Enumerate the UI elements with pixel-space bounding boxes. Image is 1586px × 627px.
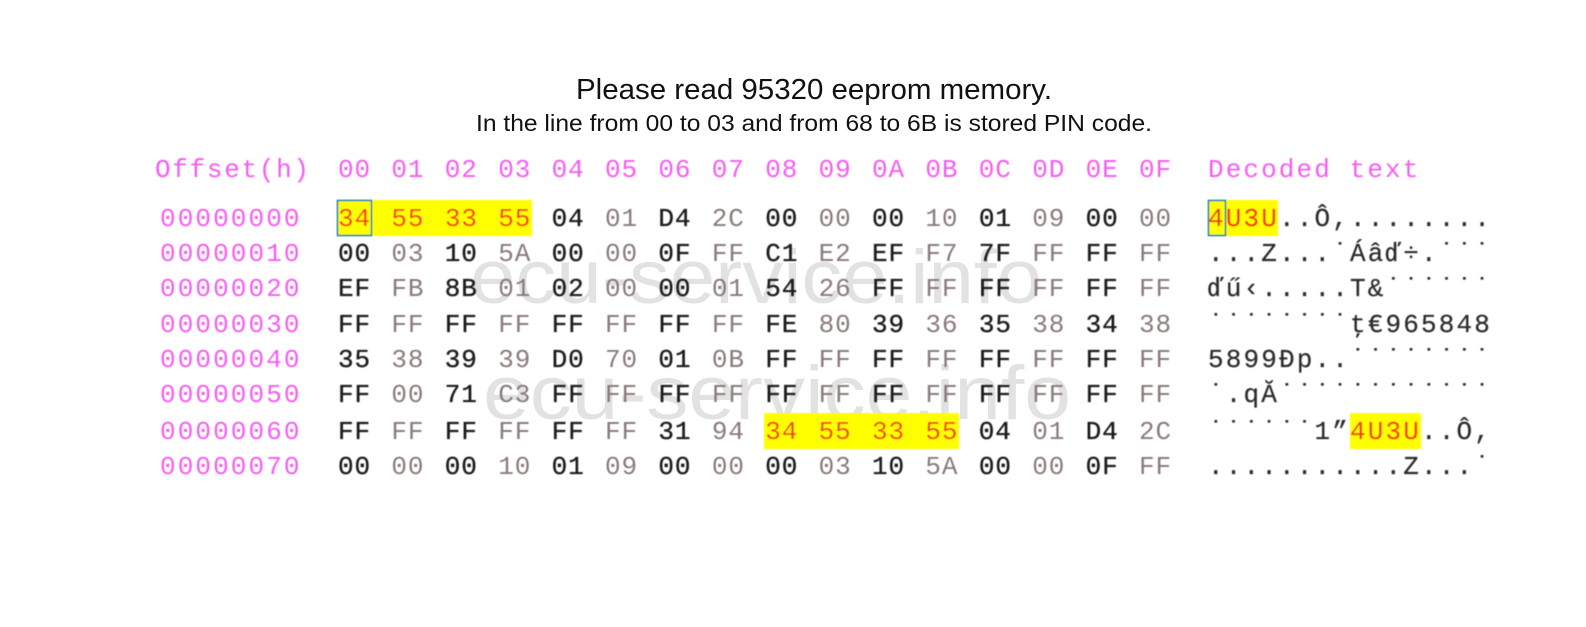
column header: byte columns: 01: [391, 155, 424, 185]
hex row 00: [338, 204, 1172, 234]
hex row 20: FB 01 00 01 26 FF FF FF: [391, 274, 1172, 304]
decoded text column: ...........Z...˙: [1208, 452, 1492, 482]
hex row 60: 04 D4: [979, 417, 1119, 447]
offset column: 00000040: [160, 345, 302, 375]
hex row 40: 35 39 D0 01 FF FF FF FF: [338, 345, 1119, 375]
column header: byte columns: 0B: [925, 155, 958, 185]
hex table: [155, 155, 1492, 482]
column header: byte columns: 0D: [1032, 155, 1065, 185]
hex row 60: FF FF FF 94: [391, 417, 745, 447]
column header: byte columns: 06: [658, 155, 691, 185]
offset column: 00000060: [160, 417, 302, 447]
subtitle: In the line from 00 to 03 and from 68 to 6B is stored PIN code.: [476, 110, 1152, 136]
highlight: second PIN bytes: [764, 413, 959, 449]
offset column: [160, 204, 302, 482]
hex row 50: FF 71 FF FF FF FF FF FF: [338, 380, 1119, 410]
hex row 20: EF 8B 02 00 54 FF FF FF: [338, 274, 1119, 304]
highlight: first PIN bytes: [337, 200, 532, 236]
decoded text column: 5899Đp..˙˙˙˙˙˙˙˙: [1208, 345, 1492, 375]
hex row 60: 34 55 33 55: [765, 417, 958, 447]
offset column: 00000050: [160, 380, 302, 410]
watermark 2: ecu-service.info: [483, 351, 1071, 436]
selection box: decoded cell: [1208, 200, 1226, 236]
decoded text column: ˙˙˙˙˙˙1”4U3U..Ô,: [1208, 417, 1492, 447]
decoded text column: ˙.qĂ˙˙˙˙˙˙˙˙˙˙˙˙: [1208, 380, 1492, 410]
column header: byte columns: 02: [445, 155, 478, 185]
hex row 60: FF FF FF 31: [338, 417, 691, 447]
column header: byte columns: 07: [712, 155, 745, 185]
highlight: decoded first PIN: [1208, 200, 1278, 236]
decoded text column: ...Z...˙Áâď÷.˙˙˙: [1208, 239, 1492, 269]
column header: byte columns: 00: [338, 155, 371, 185]
column header: byte columns: 05: [605, 155, 638, 185]
hex row 10: 00 10 00 0F C1 EF 7F FF: [338, 239, 1119, 269]
decoded text column: [1208, 204, 1492, 482]
column header: byte columns: 0C: [979, 155, 1012, 185]
column header: decoded text: Decoded text: [1208, 155, 1420, 185]
hex row 60: 01 2C: [1032, 417, 1172, 447]
offset column: 00000020: [160, 274, 302, 304]
hex row 60: [338, 417, 1172, 447]
hex row 70: 00 00 01 00 00 10 00 0F: [338, 452, 1119, 482]
selection box: hex cell: [338, 200, 372, 236]
column header: byte columns: 0F: [1139, 155, 1172, 185]
decoded text column: ˙˙˙˙˙˙˙˙ţ€965848: [1208, 310, 1492, 340]
hex row 40: 38 39 70 0B FF FF FF FF: [391, 345, 1172, 375]
hex row 10: 03 5A 00 FF E2 F7 FF FF: [391, 239, 1172, 269]
offset column: 00000010: [160, 239, 302, 269]
highlight: decoded second PIN: [1350, 413, 1421, 449]
hex row 30: FF FF FF FF 80 36 38 38: [391, 310, 1172, 340]
column header: byte columns: 04: [552, 155, 585, 185]
offset column: 00000000: [160, 204, 302, 234]
column header: offset: Offset(h): [155, 155, 311, 185]
hex row 00: 01 2C 00 10 09 00: [605, 204, 1172, 234]
offset column: 00000070: [160, 452, 302, 482]
column header: byte columns: 09: [819, 155, 852, 185]
decoded text column: ďű‹.....T&˙˙˙˙˙˙: [1208, 274, 1492, 304]
column header: byte columns: 03: [498, 155, 531, 185]
decoded text column: 4U3U..Ô,........: [1208, 204, 1492, 234]
offset column: 00000030: [160, 310, 302, 340]
column header: byte columns: [338, 155, 1172, 185]
column header: byte columns: 0A: [872, 155, 905, 185]
hex row 70: 00 10 09 00 03 5A 00 FF: [391, 452, 1172, 482]
hex row 30: FF FF FF FF FE 39 35 34: [338, 310, 1119, 340]
hex row 50: 00 C3 FF FF FF FF FF FF: [391, 380, 1172, 410]
hex row 00: 04 D4 00 00 01 00: [552, 204, 1119, 234]
column header: byte columns: 0E: [1086, 155, 1119, 185]
watermark 1: ecu-service.info: [470, 235, 1042, 320]
hex row 00: 34 55 33 55: [338, 204, 531, 234]
column header: byte columns: 08: [765, 155, 798, 185]
title: Please read 95320 eeprom memory.: [576, 74, 1052, 106]
